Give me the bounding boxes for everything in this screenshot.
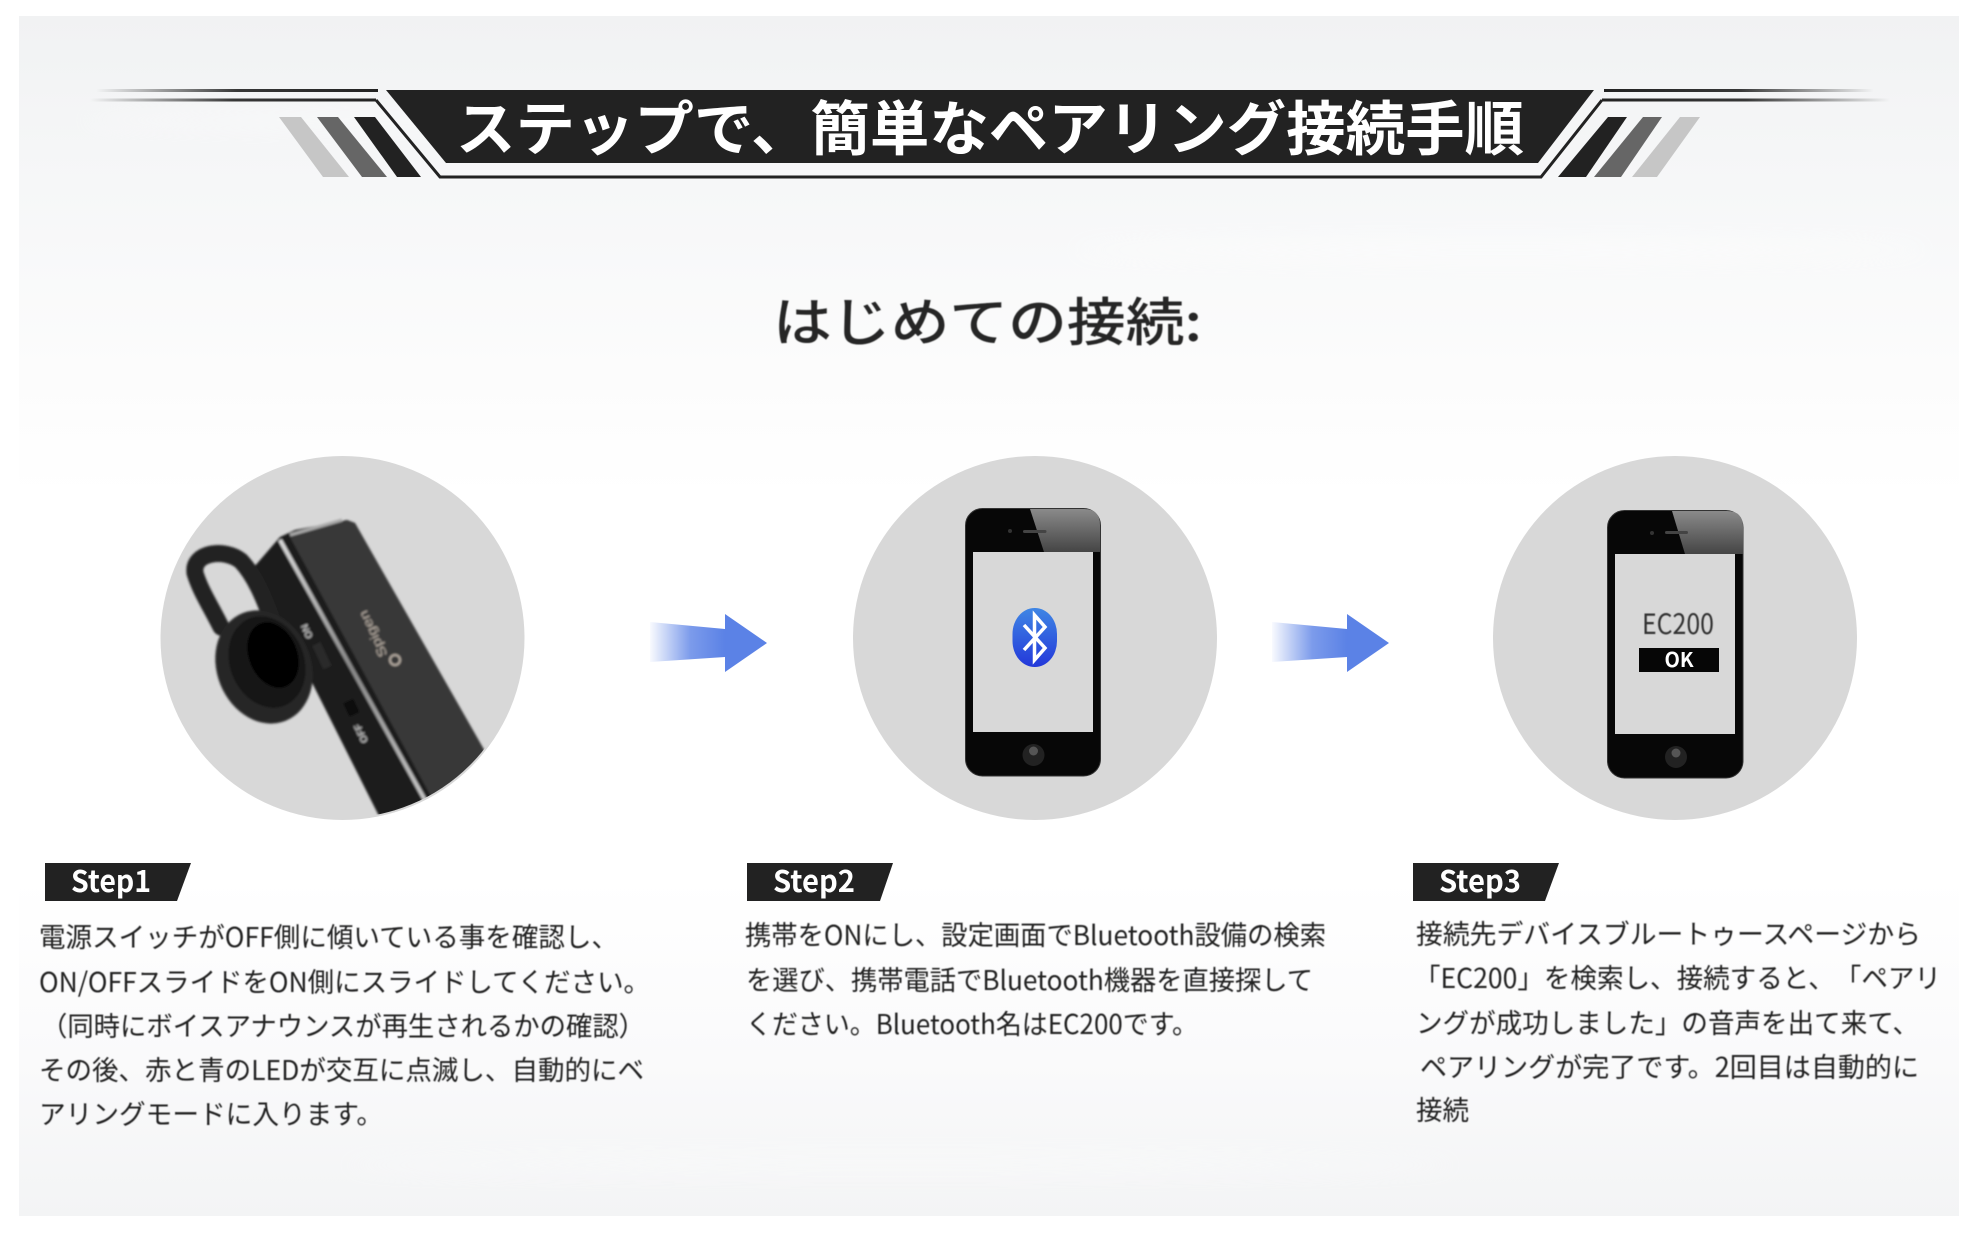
icon: smartphone [966,508,1100,776]
step 3 text: ペアリングが完了です。2回目は自動的に [1420,1046,1919,1085]
step 2 text: を選び、携帯電話でBluetooth機器を直接探して [746,959,1313,998]
step 2 illustration: phone with bluetooth [853,456,1217,820]
icon: smartphone [1608,510,1743,778]
step 3 text: 「EC200」を検索し、接続すると、「ペアリ [1414,957,1941,996]
banner dark band [386,90,1594,163]
icon: bluetooth earpiece [195,520,510,830]
step 2 text: 携帯をONにし、設定画面でBluetooth設備の検索 [745,914,1326,953]
arrow 2 [1272,614,1389,672]
banner left speed lines [90,89,421,177]
step 1 illustration: earpiece in circle [160,456,524,830]
banner outline [376,100,1602,177]
step 2 text [745,914,1326,1042]
step 3 text [1414,913,1941,1128]
title text: ステップで、簡単なペアリング接続手順 [456,82,1524,167]
device name: EC200 [1642,603,1714,643]
step 3 tag: Step3 [1439,857,1521,901]
step 1 text [39,916,650,1132]
icon: bluetooth earpiece: OFF [353,722,371,744]
step 3 block [1413,857,1941,1128]
title banner [90,82,1890,177]
step 2 tag: Step2 [773,857,855,901]
arrow 1 [650,614,767,672]
step 1 text: 電源スイッチがOFF側に傾いている事を確認し、 [39,916,618,955]
icon: bluetooth earpiece: Spigen [356,608,390,660]
OK button: OK [1664,644,1694,673]
step 3 tag [1413,857,1559,901]
step 3 text: 接続先デバイスブルートゥースページから [1416,913,1921,952]
step 3 illustration: phone with EC200 OK [1493,456,1857,820]
step 2 text: ください。Bluetooth名はEC200です。 [746,1003,1198,1042]
step 1 tag: Step1 [71,857,151,901]
step 1 text: （同時にボイスアナウンスが再生されるかの確認） [41,1005,645,1044]
icon: bluetooth earpiece: ON [300,622,316,640]
step 2 tag [747,857,893,901]
step 1 text: ON/OFFスライドをON側にスライドしてください。 [39,961,650,1000]
step 3 text: ングが成功しました」の音声を出て来て、 [1416,1002,1919,1041]
subheading: はじめての接続: [773,281,1202,356]
step 2 block [745,857,1326,1042]
step 1 tag [45,857,191,901]
OK button [1639,644,1719,673]
icon: bluetooth [1012,608,1057,667]
step 1 text: アリングモードに入ります。 [39,1093,383,1132]
step 1 block [39,857,650,1132]
step 1 text: その後、赤と青のLEDが交互に点滅し、自動的にベ [39,1049,644,1088]
banner right speed lines [1558,89,1890,177]
step 3 text: 接続 [1416,1089,1469,1128]
